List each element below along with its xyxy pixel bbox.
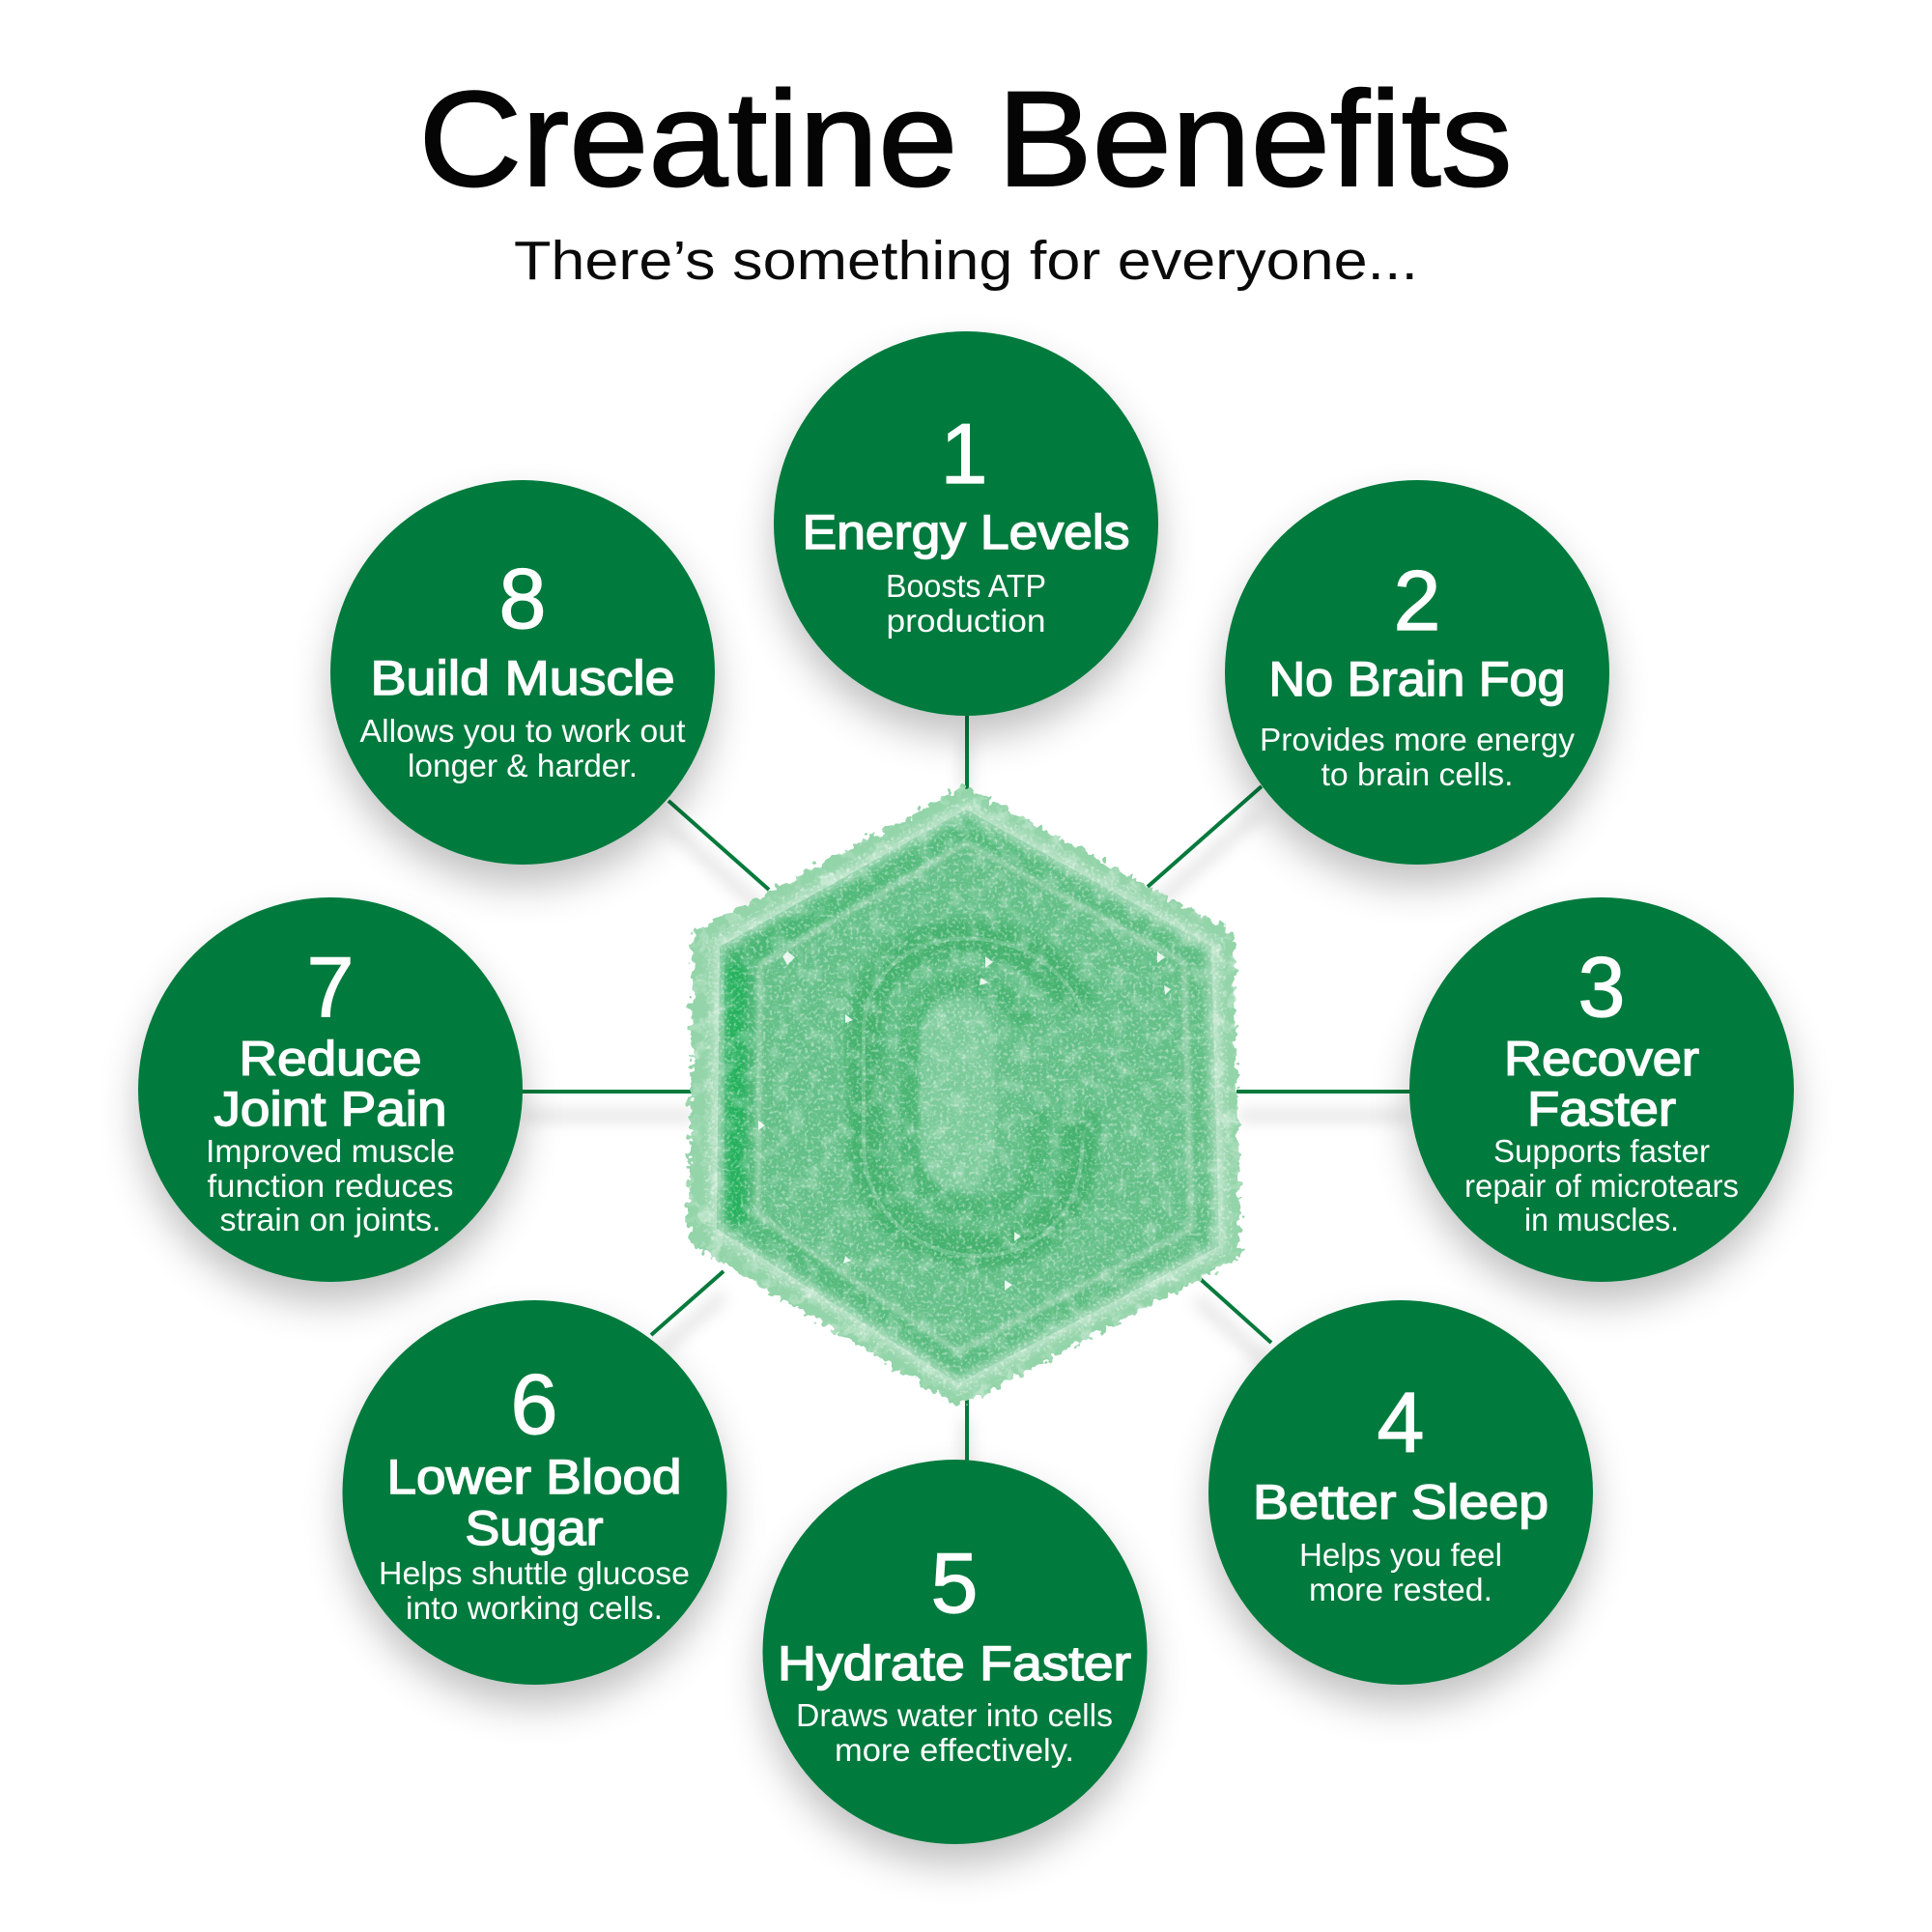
circle 6: Lower Blood Sugar [342, 1300, 726, 1685]
subtitle: There’s something for everyone... [514, 230, 1418, 292]
circle 6: Lower Blood Sugar: Helps shuttle glucose [379, 1555, 690, 1591]
circle 8: Build Muscle: 8 [499, 551, 546, 646]
circle 3: Recover Faster: 3 [1578, 939, 1625, 1035]
circle 5: Hydrate Faster: more effectively. [835, 1732, 1074, 1768]
circle 3: Recover Faster: Faster [1527, 1082, 1676, 1136]
circle 6: Lower Blood Sugar: 6 [511, 1356, 557, 1452]
sparkles [758, 952, 1171, 1291]
circle 5: Hydrate Faster: Hydrate Faster [778, 1636, 1131, 1690]
circle 2: No Brain Fog: 2 [1394, 553, 1440, 648]
circle 4: Better Sleep: more rested. [1309, 1572, 1492, 1607]
circle 4: Better Sleep [1208, 1300, 1593, 1685]
circle 7: Reduce Joint Pain: strain on joints. [220, 1202, 440, 1237]
circle 6: Lower Blood Sugar: Lower Blood [386, 1450, 682, 1504]
circle 7: Reduce Joint Pain: Improved muscle [206, 1133, 455, 1169]
connector lines [517, 710, 1415, 1478]
circle 1: Energy Levels: production [887, 603, 1045, 639]
center gummy hexagon [689, 786, 1240, 1406]
circle 4: Better Sleep: Better Sleep [1253, 1475, 1548, 1529]
circle 8: Build Muscle: Allows you to work out [359, 713, 686, 749]
circle 6: Lower Blood Sugar: into working cells. [406, 1590, 663, 1626]
circle 7: Reduce Joint Pain: function reduces [207, 1168, 454, 1204]
icon: embossed C logo [864, 938, 1082, 1256]
circle 1: Energy Levels: Boosts ATP [886, 568, 1046, 604]
circle 5: Hydrate Faster: 5 [931, 1535, 978, 1631]
circle 3: Recover Faster: Recover [1504, 1032, 1699, 1086]
circle 2: No Brain Fog: No Brain Fog [1269, 652, 1565, 706]
circle 8: Build Muscle: Build Muscle [371, 651, 674, 705]
circle 4: Better Sleep: 4 [1378, 1375, 1424, 1470]
circle 7: Reduce Joint Pain [138, 897, 523, 1282]
circle 8: Build Muscle [330, 480, 715, 865]
circle 3: Recover Faster: in muscles. [1524, 1202, 1679, 1237]
circle 2: No Brain Fog: to brain cells. [1321, 756, 1513, 792]
circle 5: Hydrate Faster: Draws water into cells [796, 1697, 1113, 1733]
circle 7: Reduce Joint Pain: Joint Pain [214, 1082, 446, 1136]
circle 2: No Brain Fog: Provides more energy [1260, 722, 1575, 757]
circle 1: Energy Levels [774, 331, 1158, 716]
circle 5: Hydrate Faster [763, 1460, 1148, 1844]
circle 4: Better Sleep: Helps you feel [1299, 1537, 1502, 1573]
circle 1: Energy Levels: Energy Levels [802, 505, 1130, 559]
title: Creatine Benefits [419, 63, 1513, 214]
circle 8: Build Muscle: longer & harder. [408, 748, 638, 783]
circle 6: Lower Blood Sugar: Sugar [466, 1501, 603, 1555]
circle 2: No Brain Fog [1225, 480, 1609, 865]
circle 7: Reduce Joint Pain: 7 [307, 939, 354, 1035]
circle 1: Energy Levels: 1 [941, 406, 987, 501]
circle 3: Recover Faster [1409, 897, 1794, 1282]
circle 3: Recover Faster: repair of microtears [1464, 1168, 1739, 1204]
circle 7: Reduce Joint Pain: Reduce [240, 1032, 421, 1086]
circle 3: Recover Faster: Supports faster [1493, 1133, 1710, 1169]
